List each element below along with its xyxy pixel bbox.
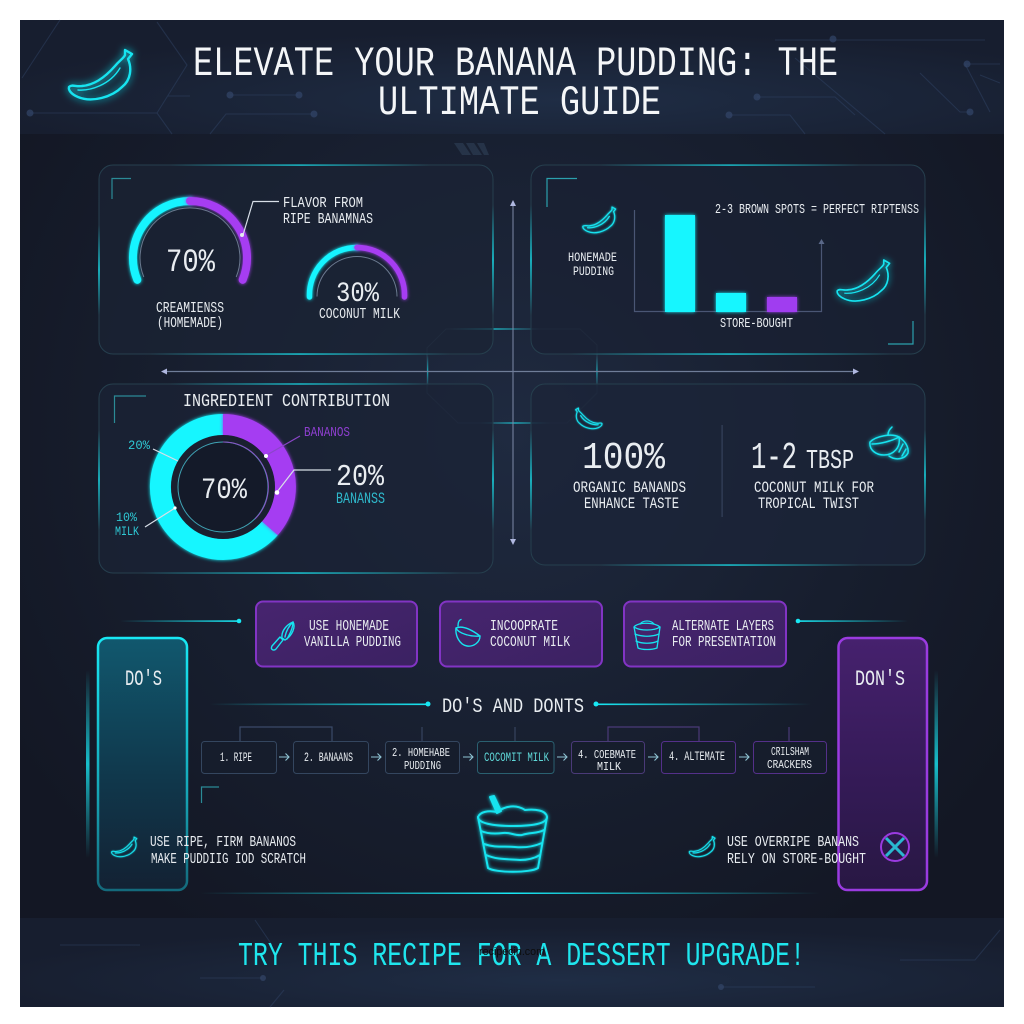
title bbox=[193, 40, 838, 127]
side glow bars bbox=[86, 670, 938, 858]
icon: banana bbox=[689, 836, 715, 857]
icon: whisk bbox=[271, 622, 294, 650]
callout: 20% left bbox=[128, 439, 178, 461]
connector lines to tip cards bbox=[120, 619, 908, 623]
icon: large banana bbox=[837, 260, 890, 301]
stat: 1-2 tbsp coconut milk: TROPICAL TWIST bbox=[758, 495, 859, 513]
gauge: 70% creaminess bbox=[133, 201, 247, 281]
flow arrows bbox=[279, 754, 749, 760]
step 6: 4. ALTEMATE bbox=[669, 750, 725, 764]
step 3 bbox=[386, 742, 460, 774]
callout: 10% milk: MILK bbox=[115, 525, 139, 539]
bar label: homemade pudding bbox=[568, 250, 617, 279]
callout: bananos: BANANOS bbox=[304, 426, 350, 441]
panel: don'ts bbox=[838, 638, 927, 890]
step 5 bbox=[572, 742, 644, 774]
callout: flavor from ripe bananas bbox=[240, 195, 373, 237]
callout: 20% bananas bbox=[275, 460, 385, 508]
panel: do's bbox=[98, 638, 187, 890]
gauge: 70% creaminess: 70% bbox=[166, 244, 216, 281]
watermark: recipecin.com bbox=[479, 946, 545, 958]
panel: don'ts: DON'S bbox=[855, 667, 905, 692]
icon: header banana bbox=[69, 50, 132, 99]
callout: 20% left: 20% bbox=[128, 439, 150, 453]
stat: 100% organic bananas: ORGANIC BANANDS bbox=[573, 479, 686, 497]
footer call to action: TRY THIS RECIPE FOR A DESSERT UPGRADE! bbox=[238, 938, 805, 975]
step 1 bbox=[202, 742, 276, 774]
do tip: ripe bananas bbox=[112, 834, 306, 868]
don't tip: overripe bananas: USE OVERRIPE BANANS bbox=[727, 834, 859, 851]
icon: coconut bbox=[870, 427, 908, 459]
step 3: PUDDING bbox=[404, 759, 441, 773]
donut chart: 70% bbox=[201, 474, 248, 508]
card: incorporate coconut milk: COCONUT MILK bbox=[490, 635, 570, 651]
step 4 bbox=[478, 742, 554, 774]
flow diagram: pudding steps bbox=[202, 727, 826, 774]
card: use homemade vanilla pudding: VANILLA PUDDING bbox=[304, 635, 401, 651]
card: use homemade vanilla pudding: USE HONEMADE bbox=[309, 619, 389, 635]
axis arrows bbox=[161, 200, 859, 545]
card: incorporate coconut milk: INCOOPRATE bbox=[490, 619, 558, 635]
stat: 100% organic bananas bbox=[573, 437, 686, 513]
callout: 10% milk: 10% bbox=[116, 511, 137, 525]
don't tip: overripe bananas bbox=[689, 834, 866, 868]
do tip: ripe bananas: MAKE PUDDIIG IOD SCRATCH bbox=[151, 851, 306, 868]
gauge: 30% coconut milk: 30% bbox=[336, 279, 379, 310]
step 5: MILK bbox=[597, 760, 622, 774]
card: alternate layers bbox=[624, 602, 786, 666]
corner accent bbox=[202, 787, 219, 803]
panel: ingredient contribution bbox=[98, 383, 494, 574]
card: incorporate coconut milk bbox=[440, 602, 602, 666]
callout: 10% milk bbox=[115, 506, 177, 539]
icon: banana bbox=[112, 837, 137, 857]
stat: 1-2 tbsp coconut milk: TBSP bbox=[806, 447, 854, 477]
step 2: 2. BANAANS bbox=[304, 751, 353, 765]
header band bbox=[20, 20, 1004, 134]
stat: 1-2 tbsp coconut milk: COCONUT MILK FOR bbox=[754, 479, 874, 497]
card: alternate layers: ALTERNATE LAYERS bbox=[672, 619, 774, 635]
step 3: 2. HOMEHABE bbox=[392, 746, 450, 760]
heading: do's and donts: DO'S AND DONTS bbox=[442, 696, 584, 719]
stat: 100% organic bananas: 100% bbox=[582, 437, 665, 480]
panel: creaminess gauges bbox=[98, 164, 494, 355]
step 2 bbox=[294, 742, 368, 774]
stat: 1-2 tbsp coconut milk: 1-2 bbox=[751, 437, 797, 480]
bar label: homemade pudding: PUDDING bbox=[573, 264, 614, 279]
step 5: 4. COEBMATE bbox=[578, 748, 636, 762]
heading: ingredient contribution: INGREDIENT CONTRIBUTION bbox=[183, 392, 390, 412]
icon: coconut bowl bbox=[456, 620, 480, 646]
heading: do's and donts bbox=[210, 696, 811, 719]
callout: flavor from ripe bananas: FLAVOR FROM bbox=[283, 195, 363, 212]
callout: flavor from ripe bananas: RIPE BANAMNAS bbox=[283, 211, 373, 228]
callout: bananos bbox=[264, 426, 350, 458]
icon: layered cup bbox=[634, 621, 660, 650]
gauge label: creaminess: CREAMIENSS bbox=[156, 300, 224, 317]
panel: do's: DO'S bbox=[125, 667, 162, 692]
callout: 20% bananas: 20% bbox=[336, 460, 384, 495]
icon: small banana bbox=[583, 207, 616, 233]
title: ULTIMATE GUIDE bbox=[378, 79, 661, 127]
footer band bbox=[20, 918, 1004, 1007]
bar chart bbox=[634, 210, 824, 312]
gauge label: creaminess: (HOMEMADE) bbox=[157, 315, 223, 332]
step 6 bbox=[662, 742, 736, 774]
donut chart bbox=[160, 424, 285, 549]
don't tip: overripe bananas: RELY ON STORE-BOUGHT bbox=[727, 851, 866, 868]
gauge label: creaminess bbox=[156, 300, 224, 332]
icon: crossed circle bbox=[881, 833, 909, 861]
gauge: 30% coconut milk: COCONUT MILK bbox=[319, 306, 400, 323]
step 7: CRACKERS bbox=[767, 758, 812, 772]
icon: banana bbox=[576, 408, 602, 429]
bottom divider glow bbox=[200, 892, 820, 894]
do tip: ripe bananas: USE RIPE, FIRM BANANOS bbox=[150, 834, 296, 851]
step 7: CRILSHAM bbox=[771, 745, 809, 759]
chart note: brown spots: 2-3 BROWN SPOTS = PERFECT RIPTENSS bbox=[715, 203, 919, 218]
axis label: store-bought: STORE-BOUGHT bbox=[720, 317, 793, 332]
icon: pudding cup bbox=[478, 796, 547, 872]
title: ELEVATE YOUR BANANA PUDDING: THE bbox=[193, 40, 838, 88]
step 4: COCOMIT MILK bbox=[484, 751, 549, 765]
step 7 bbox=[754, 742, 826, 774]
step 1: 1. RIPE bbox=[220, 751, 252, 765]
card: use homemade vanilla pudding bbox=[256, 602, 417, 666]
central axis octagon bbox=[427, 143, 598, 424]
panel: key amounts bbox=[530, 384, 926, 566]
gauge: 30% coconut milk bbox=[309, 247, 405, 323]
stat: 1-2 tbsp coconut milk bbox=[751, 437, 874, 513]
stat: 100% organic bananas: ENHANCE TASTE bbox=[584, 495, 679, 513]
bar label: homemade pudding: HONEMADE bbox=[568, 250, 617, 265]
card: alternate layers: FOR PRESENTATION bbox=[672, 635, 776, 651]
callout: 20% bananas: BANANSS bbox=[336, 490, 385, 508]
panel: homemade vs store-bought bar chart bbox=[530, 164, 926, 355]
